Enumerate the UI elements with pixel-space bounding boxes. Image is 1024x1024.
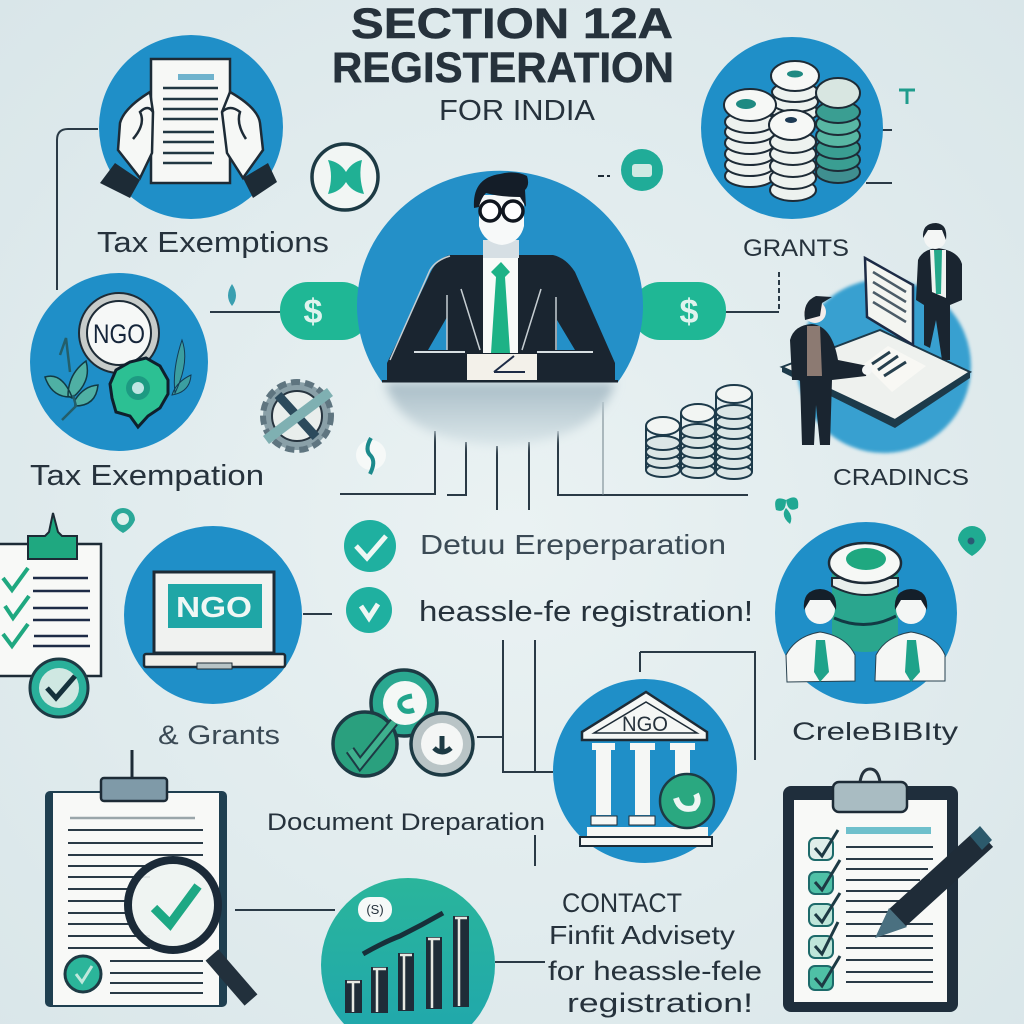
label: & grants: & Grants xyxy=(158,720,280,750)
icon: clipboard with checks left xyxy=(0,513,101,717)
icon: small teal badge top centre xyxy=(598,149,663,191)
right dollar pill xyxy=(632,282,726,340)
icon: three linked badges xyxy=(333,670,473,776)
title: REGISTERATION xyxy=(332,44,674,92)
connector lines xyxy=(57,129,892,962)
label: cradincs: CRADINCS xyxy=(833,464,969,490)
central figure xyxy=(357,171,643,446)
title: SECTION 12A xyxy=(351,0,673,48)
icon: crossed gear xyxy=(263,382,331,450)
contact text block: for heassle-fele xyxy=(548,956,762,986)
icon: NGO bank building in circle: NGO xyxy=(622,713,668,736)
label: credibility: CreleBIBIty xyxy=(792,718,959,746)
contact text block: registration! xyxy=(567,988,753,1018)
icon: growth bar chart in circle: (S) xyxy=(366,902,384,917)
check row: detailed preparation xyxy=(344,520,726,572)
icon: small teal t mark xyxy=(899,90,915,104)
label: grants top right: GRANTS xyxy=(743,235,849,262)
icon: teal badge top left xyxy=(312,144,378,210)
check row: hassle-free registration: heassle-fe registration! xyxy=(419,596,753,628)
icon: coin stacks in circle xyxy=(701,37,883,219)
label: tax exemption: Tax Exempation xyxy=(30,460,264,492)
icon: small teal leaf xyxy=(775,497,798,524)
icon: location pins xyxy=(111,508,986,556)
title xyxy=(332,0,674,127)
check row: hassle-free registration xyxy=(346,587,753,633)
icon: NGO circle with leaves and gear xyxy=(30,273,208,451)
title: FOR INDIA xyxy=(439,95,596,127)
label: tax exemptions: Tax Exemptions xyxy=(97,227,329,259)
icon: NGO circle with leaves and gear: NGO xyxy=(93,319,145,349)
icon: NGO bank building in circle xyxy=(553,679,737,863)
contact text block: CONTACT xyxy=(562,888,682,918)
contact text block: Finfit Advisety xyxy=(549,920,735,950)
contact text block xyxy=(548,888,762,1018)
icon: laptop NGO in circle xyxy=(124,526,302,704)
icon: growth bar chart in circle xyxy=(321,878,495,1024)
icon: two men at desk xyxy=(782,223,971,453)
right dollar pill: $ xyxy=(680,293,699,331)
check row: detailed preparation: Detuu Ereperparation xyxy=(420,529,726,560)
icon: clipboard with magnifying glass xyxy=(45,750,251,1007)
icon: hands holding document xyxy=(99,35,283,219)
left dollar pill xyxy=(280,282,370,340)
label: document preparation: Document Dreparation xyxy=(267,809,545,836)
left dollar pill: $ xyxy=(304,293,323,331)
icon: coin stacks centre xyxy=(646,385,752,479)
icon: two people with teal stack xyxy=(775,522,957,704)
small decorative icons xyxy=(228,284,386,474)
icon: laptop NGO in circle: NGO xyxy=(176,592,252,624)
icon: checklist clipboard with pen xyxy=(783,769,992,1012)
